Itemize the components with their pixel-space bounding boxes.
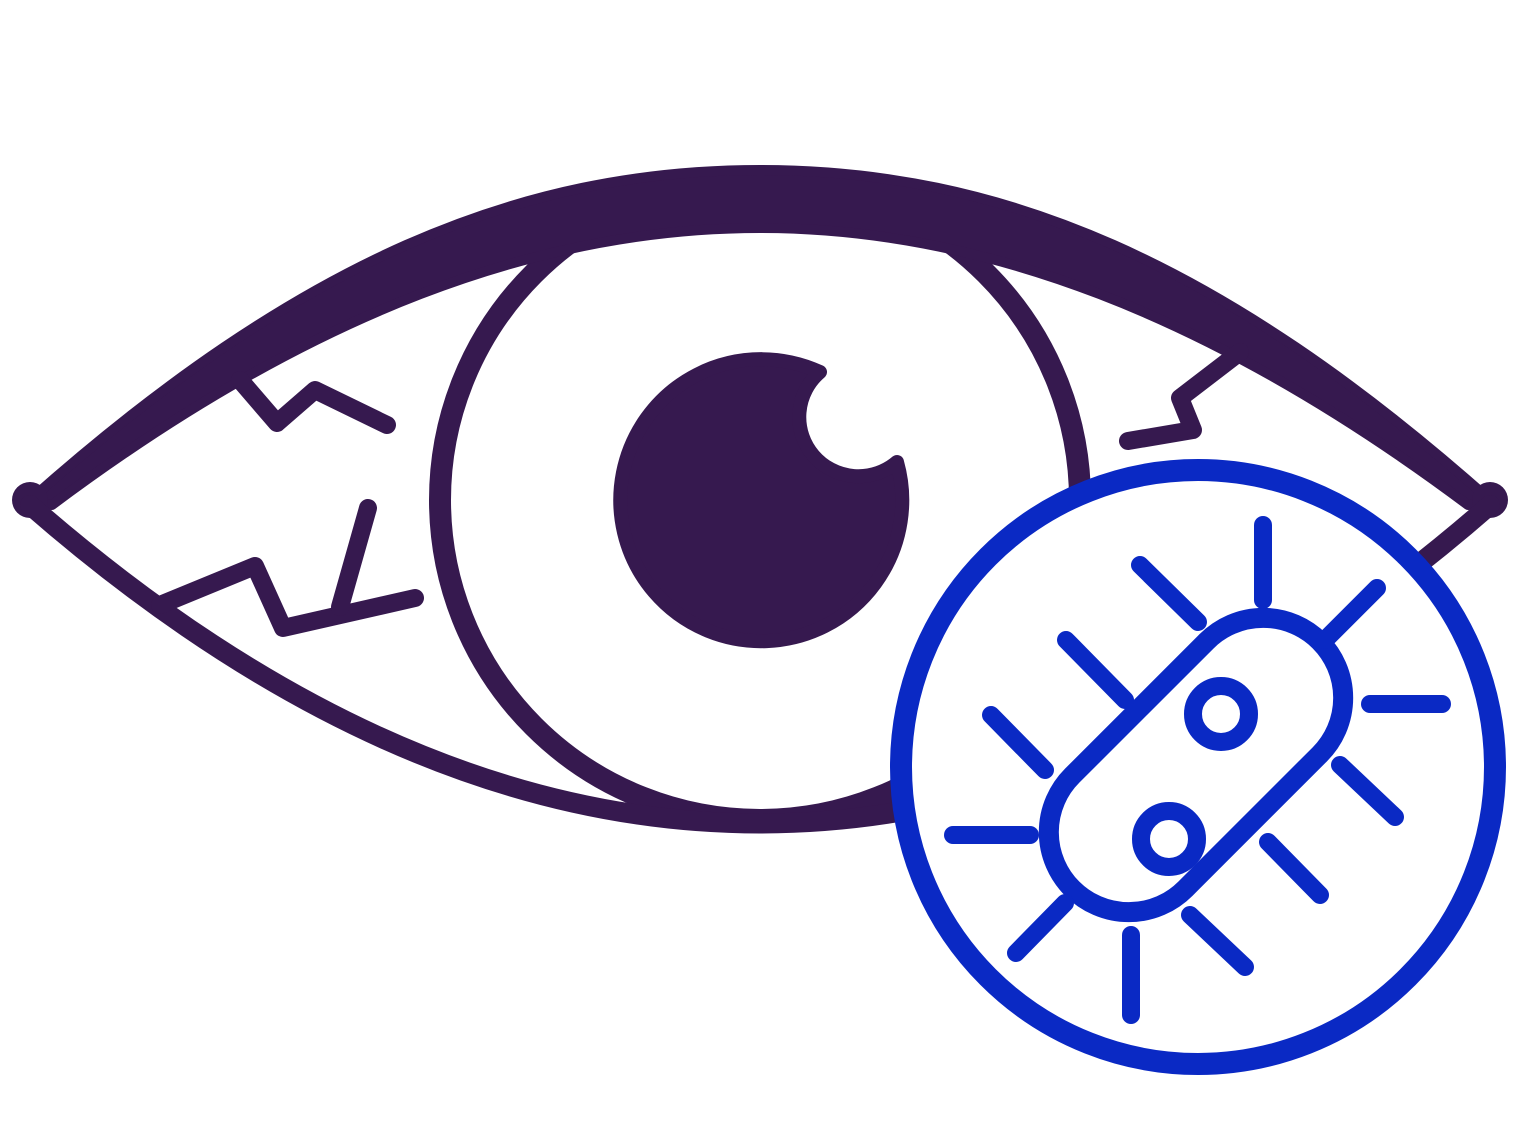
lower eyelid: [30, 505, 1490, 824]
upper eyelid: [30, 170, 1490, 505]
bacterium body: [953, 525, 1442, 1015]
illustration: eye infection icon: [12, 165, 1508, 1075]
eye: [12, 170, 1508, 824]
iris: [440, 180, 1080, 820]
veins: [160, 352, 1240, 628]
bacteria badge: [901, 470, 1495, 1064]
pupil: [620, 359, 902, 641]
